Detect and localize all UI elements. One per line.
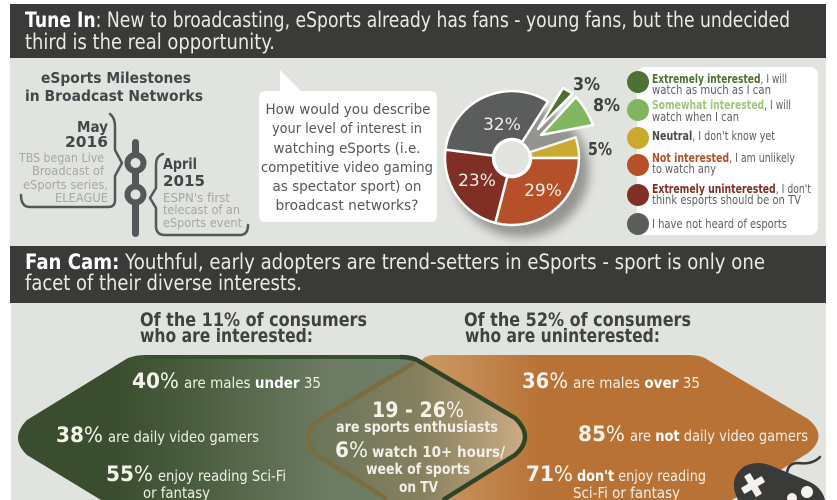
milestone: April 2015: ESPN's first (163, 191, 230, 205)
legend item: extremely interested (627, 71, 787, 97)
milestone: May 2016 (18, 114, 122, 207)
heading: uninterested consumers: who are uninterested: (465, 325, 660, 347)
stat: 40% males under 35: 40% (132, 369, 179, 393)
pie chart (445, 74, 620, 237)
speech bubble question: as spectator sport) on (272, 179, 422, 195)
stat: 71% no sci-fi: don't enjoy reading (577, 467, 706, 485)
milestone: April 2015: eSports event (163, 216, 242, 230)
shape: overlap diamond (308, 357, 525, 500)
speech bubble question: How would you describe (266, 102, 430, 118)
legend item: extremely interested: Extremely interested, I will (652, 72, 787, 86)
legend item: not interested: Not interested, I am unlikely (652, 151, 795, 165)
speech bubble question: your level of interest in (272, 121, 422, 137)
legend item: not heard: I have not heard of esports (652, 217, 787, 231)
stat: 40% males under 35: are males under 35 (184, 374, 321, 392)
milestones title: eSports Milestones (41, 69, 191, 87)
panel: Fan Cam background (11, 303, 826, 500)
pie chart: 32% (483, 115, 521, 135)
legend item: extremely uninterested: think esports should be on TV (652, 193, 802, 207)
milestone: April 2015: April (163, 155, 197, 173)
heading: Tune In: third is the real opportunity. (25, 30, 275, 54)
shape: interested hexagon (18, 355, 425, 500)
stat: overlap sports enthusiasts (335, 398, 505, 496)
stat: 36% males over 35: 36% (522, 369, 568, 393)
legend item: neutral: Neutral, I don't know yet (652, 129, 775, 143)
stat: overlap sports enthusiasts: watch 10+ hours/ (372, 443, 505, 461)
milestone: April 2015: telecast of an (163, 203, 240, 217)
milestone: May 2016: TBS began Live (18, 151, 104, 165)
legend item: not interested (627, 151, 795, 176)
legend item: neutral (627, 127, 775, 149)
stat: overlap sports enthusiasts: 19 - 26% (372, 398, 464, 422)
stat: 55% sci-fi (106, 462, 286, 500)
legend item: extremely uninterested: Extremely uninterested, I don't (652, 182, 811, 196)
stat: 85% not daily gamers: are not daily video gamers (630, 427, 808, 445)
stat: overlap sports enthusiasts: are sports enthusiasts (336, 418, 498, 436)
pie chart: 23% (458, 171, 496, 191)
speech bubble question: watching eSports (i.e. (274, 141, 420, 157)
pie chart: 3% (573, 74, 600, 95)
shape: uninterested hexagon (420, 355, 818, 500)
stat: 36% males over 35 (522, 369, 700, 393)
pie chart: 8% (593, 95, 620, 116)
slice: somewhat interested 8% (541, 97, 593, 135)
legend item: extremely interested: watch as much as I can (652, 83, 771, 97)
stat: 55% sci-fi: 55% (106, 462, 153, 486)
heading: interested consumers (140, 309, 367, 347)
slice: extremely interested 3% (538, 88, 573, 129)
heading: uninterested consumers: Of the 52% of consumers (464, 309, 691, 331)
milestone timeline (128, 139, 144, 237)
stat: 38% daily gamers: are daily video gamers (108, 428, 259, 446)
milestone: April 2015: 2015 (163, 172, 205, 190)
legend (627, 67, 818, 235)
stat: 71% no sci-fi (526, 462, 706, 500)
milestone: May 2016: ELEAGUE (55, 191, 108, 205)
stat: 38% daily gamers (56, 423, 259, 447)
stat: 85% not daily gamers (578, 422, 808, 446)
heading: Fan Cam: facet of their diverse interests. (25, 271, 302, 295)
heading: Tune In (10, 4, 826, 58)
stat: 40% males under 35 (132, 369, 321, 393)
stat: 71% no sci-fi: 71% (526, 462, 573, 486)
legend item: somewhat interested: watch when I can (652, 110, 739, 124)
stat: overlap sports enthusiasts: on TV (399, 478, 438, 496)
stat: 38% daily gamers: 38% (56, 423, 103, 447)
stat: overlap sports enthusiasts: 6% (335, 438, 368, 462)
milestone: May 2016: May (77, 118, 108, 136)
slice: extremely uninterested 23% (445, 150, 507, 223)
milestone: May 2016: 2016 (65, 133, 108, 151)
pie chart: 29% (524, 181, 562, 201)
stat: 85% not daily gamers: 85% (578, 422, 625, 446)
speech bubble question (259, 70, 437, 222)
slice: neutral 5% (530, 137, 579, 158)
slice: not interested 29% (495, 158, 579, 225)
legend item: not interested: to watch any (652, 162, 716, 176)
heading: uninterested consumers (464, 309, 691, 347)
heading: interested consumers: Of the 11% of consumers (140, 309, 367, 331)
pie chart: 5% (588, 139, 612, 160)
heading: interested consumers: who are interested: (140, 325, 313, 347)
stat: 55% sci-fi: enjoy reading Sci-Fi (158, 467, 286, 485)
legend item: somewhat interested (627, 98, 791, 124)
milestone: May 2016: Broadcast of (32, 164, 105, 178)
legend item: not heard (627, 213, 787, 235)
speech bubble question: competitive video gaming (261, 160, 433, 176)
legend item: extremely uninterested (627, 182, 811, 207)
stat: 36% males over 35: are males over 35 (573, 374, 700, 392)
milestone: April 2015 (150, 154, 248, 235)
legend item: somewhat interested: Somewhat interested, I will (652, 98, 791, 112)
speech bubble question: broadcast networks? (276, 198, 418, 214)
icon: game controller (734, 457, 825, 500)
pie hole (494, 140, 530, 176)
panel: Tune In background (10, 58, 826, 246)
milestone: May 2016: eSports series, (23, 178, 108, 192)
milestones title: in Broadcast Networks (25, 87, 203, 105)
milestones title (25, 69, 203, 105)
stat: overlap sports enthusiasts: week of sports (366, 460, 470, 478)
slice: not heard 32% (446, 91, 548, 156)
heading: Fan Cam (10, 246, 826, 303)
